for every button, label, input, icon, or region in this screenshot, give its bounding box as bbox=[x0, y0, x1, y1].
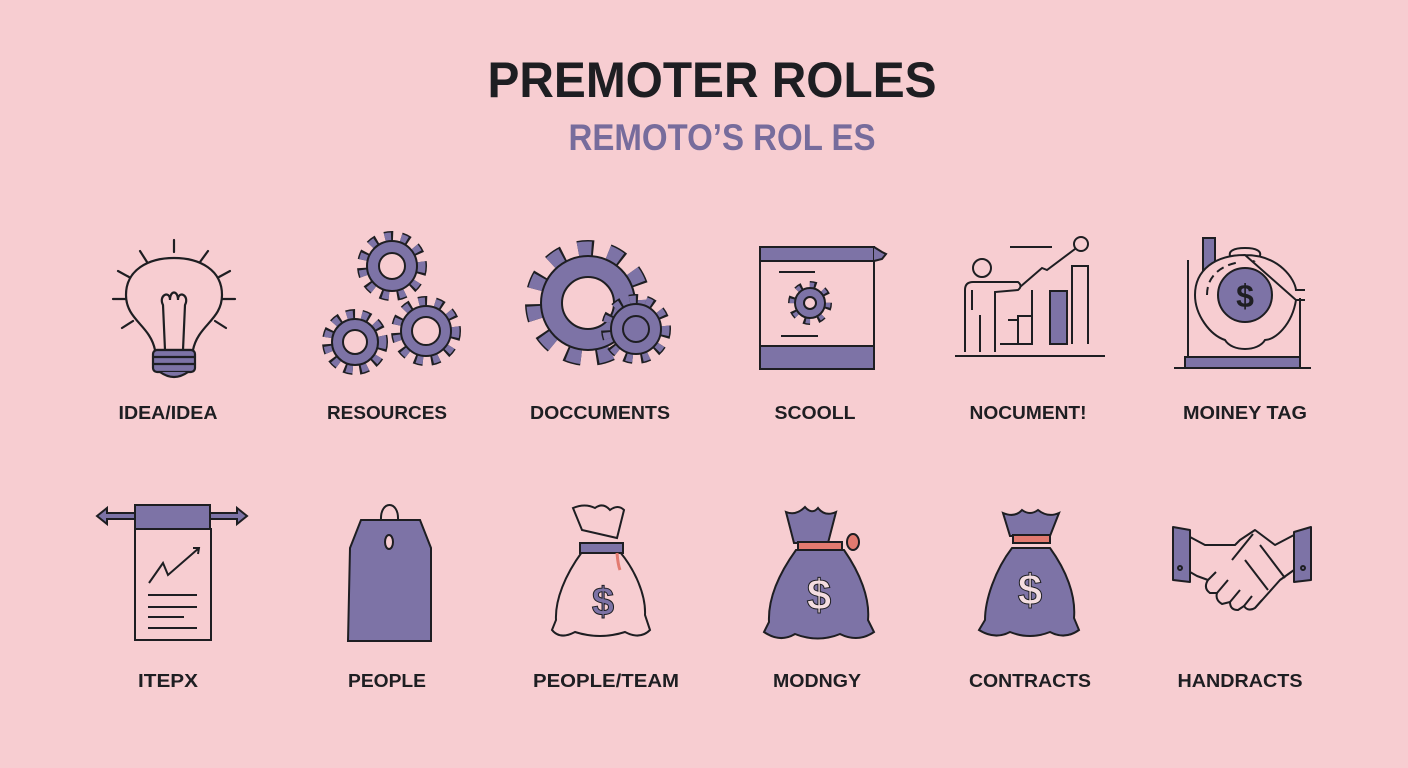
icon: filled money bag: $ bbox=[807, 571, 831, 620]
icon: filled money bag bbox=[764, 507, 874, 638]
icon: scroll with gear bbox=[760, 247, 886, 369]
title: PREMOTER ROLES bbox=[488, 52, 936, 108]
label: people: PEOPLE bbox=[348, 671, 426, 691]
icon: price tag bbox=[348, 505, 431, 641]
icon: scroll chart bbox=[97, 505, 247, 640]
label: nocument: NOCUMENT! bbox=[970, 403, 1086, 423]
label: resources: RESOURCES bbox=[327, 403, 447, 423]
label: itepx: ITEPX bbox=[138, 671, 198, 691]
label: people/team: PEOPLE/TEAM bbox=[533, 671, 679, 691]
icon: presenter with bar chart bbox=[955, 237, 1105, 356]
label: modngy: MODNGY bbox=[773, 671, 861, 691]
icon: money machine: $ bbox=[1236, 278, 1254, 314]
label: money tag: MOINEY TAG bbox=[1183, 403, 1307, 423]
icon: outline money bag bbox=[552, 505, 650, 636]
label: idea: IDEA/IDEA bbox=[118, 403, 218, 423]
label: contracts: CONTRACTS bbox=[969, 671, 1091, 691]
icon: resources gears bbox=[329, 238, 454, 368]
icon: money machine bbox=[1174, 238, 1311, 368]
icon: light bulb bbox=[113, 240, 235, 377]
label: scroll: SCOOLL bbox=[774, 403, 856, 423]
icon: handshake bbox=[1173, 527, 1311, 610]
icon: big gear pair bbox=[536, 251, 664, 357]
icon: filled money bag 2 bbox=[979, 510, 1079, 636]
icon: outline money bag: $ bbox=[592, 580, 614, 624]
icon: filled money bag 2: $ bbox=[1018, 566, 1042, 615]
label: handracts: HANDRACTS bbox=[1178, 671, 1302, 691]
subtitle: REMOTO’S ROL ES bbox=[568, 117, 876, 158]
label: documents: DOCCUMENTS bbox=[530, 403, 670, 423]
